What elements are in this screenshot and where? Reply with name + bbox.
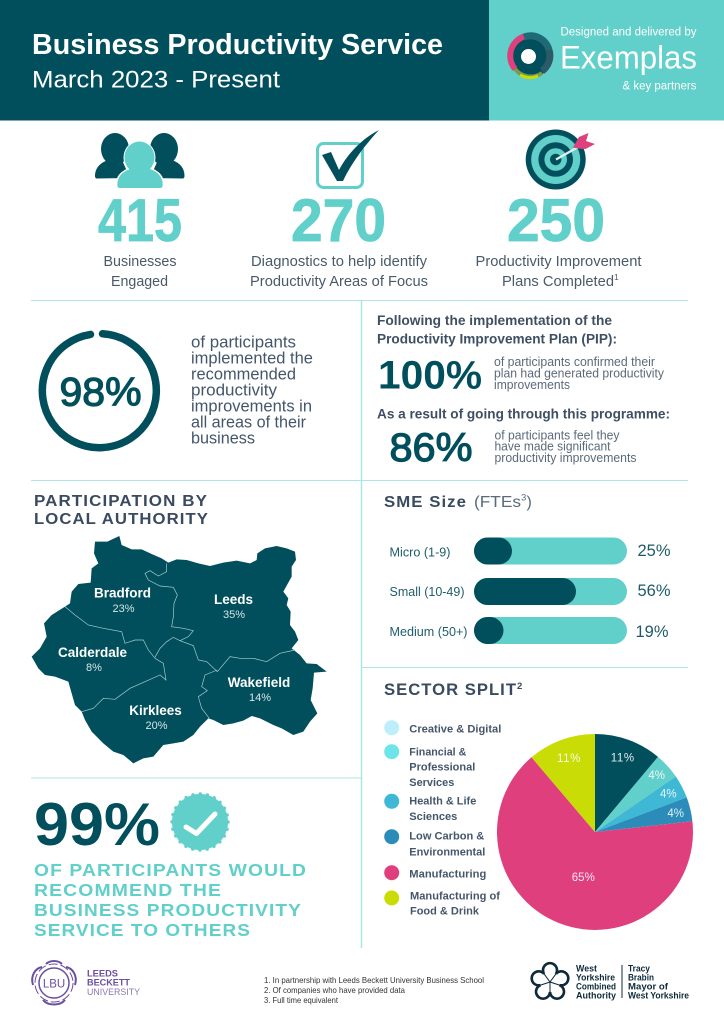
description: recommended xyxy=(191,366,296,384)
description: of participants confirmed their xyxy=(494,355,655,369)
description: productivity xyxy=(191,382,278,400)
delivered by text: Designed and delivered by xyxy=(560,26,697,38)
legend: Manufacturing of xyxy=(410,890,500,902)
heading: 3 xyxy=(521,492,526,504)
number 415: 415 xyxy=(98,187,182,254)
legend: Low Carbon & xyxy=(409,830,484,842)
description: of participants feel they xyxy=(494,428,620,442)
bar: medium: 19% xyxy=(636,622,668,641)
footnote marker: 1 xyxy=(614,272,619,282)
label: Engaged xyxy=(111,274,168,290)
heading: Following the implementation of the xyxy=(377,313,612,328)
number 250: 250 xyxy=(507,187,605,254)
heading xyxy=(384,492,532,511)
icon: checkbox xyxy=(318,130,379,188)
key partners text: & key partners xyxy=(622,80,697,92)
pie chart: 65% xyxy=(572,872,595,884)
stat: businesses engaged xyxy=(95,133,184,290)
pie chart: 4% xyxy=(667,808,684,820)
stat: diagnostics xyxy=(250,130,428,290)
panel: participation by local authority xyxy=(32,493,327,763)
heading: As a result of going through this programme: xyxy=(377,406,670,422)
bar: small xyxy=(390,578,670,605)
recommendation text: SERVICE TO OTHERS xyxy=(34,920,251,940)
label: Leeds: Leeds xyxy=(214,592,253,607)
bar: micro xyxy=(390,538,670,564)
legend: Environmental xyxy=(409,846,485,858)
recommendation text: RECOMMEND THE xyxy=(34,880,222,900)
heading xyxy=(34,493,209,528)
pie chart xyxy=(497,734,693,930)
bar: medium: Medium (50+) xyxy=(390,625,468,639)
logo: West Yorkshire Combined Authority: Mayor of xyxy=(628,982,669,992)
label: Productivity Areas of Focus xyxy=(250,274,428,290)
description: of participants xyxy=(191,334,296,352)
number 100%: 100% xyxy=(378,354,482,398)
pie chart: 4% xyxy=(660,788,677,800)
legend: Food & Drink xyxy=(410,906,480,918)
heading: PARTICIPATION BY xyxy=(34,493,208,510)
header banner xyxy=(0,0,724,120)
label: Bradford: 23% xyxy=(112,603,135,615)
icon: Exemplas logo mark xyxy=(509,34,552,78)
pie chart: 11% xyxy=(557,753,581,765)
description: productivity improvements xyxy=(494,451,636,465)
description: all areas of their xyxy=(191,414,306,432)
description xyxy=(494,355,665,392)
subtitle: March 2023 - Present xyxy=(32,66,280,94)
description: have made significant xyxy=(494,440,611,454)
logo: West Yorkshire Combined Authority: Tracy xyxy=(628,964,650,974)
heading: (FTEs xyxy=(474,494,521,511)
label: Productivity Improvement xyxy=(476,254,642,270)
description: implemented the xyxy=(191,350,313,368)
panel: PIP results xyxy=(377,313,670,470)
logo: Leeds Beckett University: BECKETT xyxy=(87,978,130,989)
panel: sector split xyxy=(384,681,693,930)
description: plan had generated productivity xyxy=(494,366,665,380)
bar: medium xyxy=(390,617,668,644)
ring chart 98% xyxy=(42,334,156,448)
legend: Professional xyxy=(409,762,475,774)
stat: improvement plans xyxy=(476,130,642,290)
pie chart: 11% xyxy=(611,752,635,764)
number 270: 270 xyxy=(291,187,386,254)
bar: micro: 25% xyxy=(638,541,670,560)
legend: Sciences xyxy=(409,811,457,823)
panel: 98% implemented xyxy=(42,334,313,448)
logo: Leeds Beckett University: UNIVERSITY xyxy=(87,987,141,998)
label: Diagnostics to help identify xyxy=(251,254,428,270)
heading: LOCAL AUTHORITY xyxy=(34,511,209,528)
footnote marker: 2 xyxy=(517,681,522,692)
label: Kirklees: Kirklees xyxy=(129,703,182,718)
icon: target xyxy=(526,130,595,190)
logo: West Yorkshire Combined Authority: Authority xyxy=(576,991,616,1001)
heading xyxy=(377,313,617,346)
label: Kirklees xyxy=(129,703,182,732)
heading: Productivity Improvement Plan (PIP): xyxy=(377,332,617,346)
recommendation text xyxy=(34,860,307,940)
bar: small: 56% xyxy=(638,581,670,600)
pie chart: 4% xyxy=(648,770,665,782)
description xyxy=(494,428,636,465)
logo: West Yorkshire Combined Authority: Brabin xyxy=(628,973,654,983)
logo: Leeds Beckett University: LBU xyxy=(43,978,65,990)
bar: small: Small (10-49) xyxy=(390,585,464,599)
logo: West Yorkshire Combined Authority: Yorkshire xyxy=(576,973,615,983)
map of West Yorkshire xyxy=(32,536,327,763)
recommendation text: OF PARTICIPANTS WOULD xyxy=(34,860,307,880)
label: Bradford xyxy=(94,586,151,615)
legend xyxy=(384,720,501,918)
number 86%: 86% xyxy=(390,426,472,470)
label: Calderdale: 8% xyxy=(86,662,102,674)
label: Wakefield: 14% xyxy=(249,692,271,704)
description: improvements xyxy=(494,378,570,392)
logo: West Yorkshire Combined Authority xyxy=(532,963,689,1001)
legend: Manufacturing xyxy=(409,868,486,880)
description: improvements in xyxy=(191,398,312,416)
bar: micro: Micro (1-9) xyxy=(390,546,450,560)
panel: SME size xyxy=(384,492,670,644)
icon: people xyxy=(95,133,184,189)
footnotes xyxy=(264,975,484,1005)
label: Leeds: 35% xyxy=(223,609,245,621)
logo: Leeds Beckett University: LEEDS xyxy=(87,969,118,980)
number 98%: 98% xyxy=(60,370,142,414)
Exemplas wordmark: Exemplas xyxy=(560,40,697,76)
heading: SECTOR SPLIT xyxy=(384,681,517,699)
footer xyxy=(32,961,689,1005)
description: business xyxy=(191,430,255,448)
label: Wakefield: Wakefield xyxy=(228,675,290,690)
logo: West Yorkshire Combined Authority: West xyxy=(576,964,597,974)
heading: SME Size xyxy=(384,494,467,511)
label: Plans Completed xyxy=(502,274,614,290)
legend: Creative & Digital xyxy=(409,724,501,736)
label: Calderdale: Calderdale xyxy=(58,645,128,660)
legend: Health & Life xyxy=(409,796,476,808)
description xyxy=(191,334,313,448)
footnotes: 1. In partnership with Leeds Beckett University Business School xyxy=(264,975,484,985)
footnotes: 3. Full time equivalent xyxy=(264,995,339,1005)
icon: check badge xyxy=(172,794,228,850)
recommendation text: BUSINESS PRODUCTIVITY xyxy=(34,900,302,920)
legend: Financial & xyxy=(409,746,466,758)
logo: West Yorkshire Combined Authority: Combined xyxy=(576,982,616,992)
panel: 99% recommend xyxy=(34,791,307,940)
label: Calderdale xyxy=(58,645,128,674)
label: Bradford: Bradford xyxy=(94,586,151,600)
title: Business Productivity Service xyxy=(32,29,443,61)
logo: Leeds Beckett University xyxy=(32,961,141,1004)
footnotes: 2. Of companies who have provided data xyxy=(264,985,405,995)
number 99%: 99% xyxy=(34,791,160,858)
label: Kirklees: 20% xyxy=(145,720,168,732)
heading: ) xyxy=(526,494,532,511)
label: Leeds xyxy=(214,592,253,621)
label: Wakefield xyxy=(228,675,290,704)
label: Businesses xyxy=(104,254,176,270)
legend: Services xyxy=(409,777,454,789)
logo: West Yorkshire Combined Authority: West Yorkshire xyxy=(628,991,689,1001)
